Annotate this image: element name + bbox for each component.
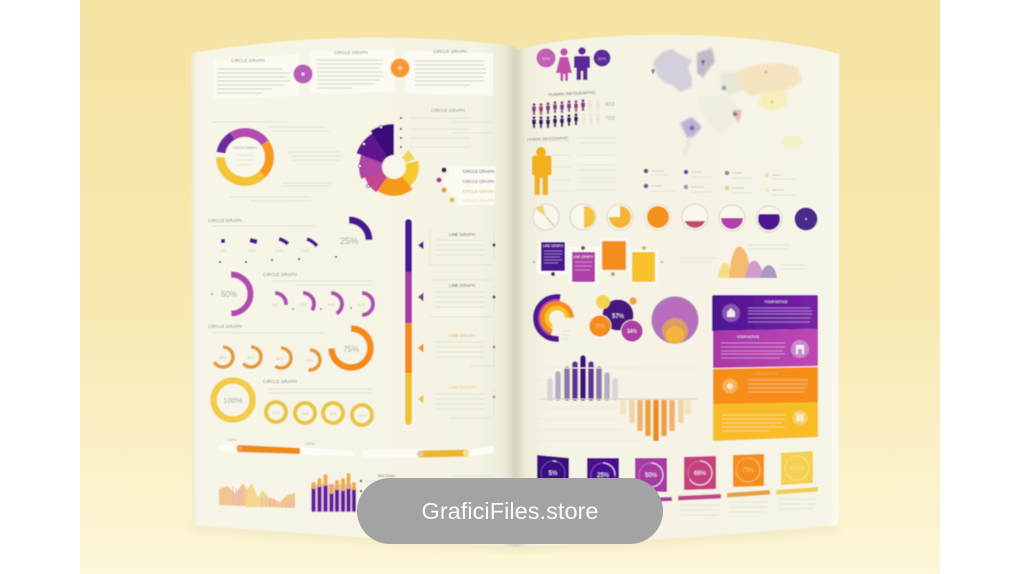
50 percent row: 30% <box>271 303 279 307</box>
percent tiles: 25% <box>597 473 610 479</box>
progress slider orange: 100% <box>228 438 236 442</box>
progress slider orange <box>218 438 354 456</box>
header panels: CIRCLE GRAPH <box>231 58 265 63</box>
25 percent row: CIRCLE GRAPH <box>208 218 242 223</box>
panel: yellow note <box>713 402 818 441</box>
percent circles male female: 50% <box>598 56 606 61</box>
100 percent row: 80% <box>272 411 280 415</box>
human body diagram: HUMAN INFOGRAPHIC <box>527 136 569 142</box>
50 percent row: 40% <box>327 303 335 307</box>
diverging bar chart: up <box>550 358 615 398</box>
100 percent row: 85% <box>301 412 309 416</box>
bubble chart: 25% <box>595 324 606 330</box>
percent tiles <box>537 451 813 495</box>
panel: orange note <box>713 367 818 404</box>
75 percent row: 75% <box>343 345 359 354</box>
rose chart markers: CIRCLE GRAPH <box>431 108 465 113</box>
map legend <box>644 169 795 195</box>
book shadow <box>192 520 838 552</box>
donut chart: CIRCLE GRAPH <box>233 146 258 150</box>
icon: pink circle <box>294 64 312 84</box>
heading: human infographic: HUMAN INFOGRAPHIC <box>548 90 596 97</box>
75 percent row: 65% <box>276 357 284 361</box>
pictogram rows <box>532 99 615 128</box>
25 percent row: 5% <box>221 249 227 253</box>
legend: circle graph: CIRCLE GRAPH <box>463 189 494 194</box>
bubble chart: 34% <box>627 329 638 335</box>
25 percent row <box>208 218 369 262</box>
world map <box>651 48 803 157</box>
75 percent row: 60% <box>247 356 255 360</box>
radial bar chart <box>534 295 580 341</box>
percent tiles: 5% <box>549 471 558 477</box>
25 percent row: 15% <box>275 249 283 253</box>
rose chart markers <box>400 108 492 148</box>
panel: pink note <box>713 329 818 368</box>
step cards: LINE GRAPH <box>573 255 594 259</box>
50 percent row <box>212 272 373 315</box>
50 percent row: 45% <box>357 303 365 307</box>
panel: purple note: YOUR NOTICE <box>765 300 788 304</box>
icon: orange circle <box>390 58 410 78</box>
step cards: LINE GRAPH <box>543 244 564 248</box>
percent tiles: 66% <box>694 471 707 477</box>
50 percent row: CIRCLE GRAPH <box>263 272 297 277</box>
pictogram rows: 8/10 <box>605 102 615 108</box>
left page <box>191 38 516 547</box>
100 percent row: 100% <box>223 396 243 405</box>
diverging bar chart: down <box>532 368 700 441</box>
bubble chart <box>589 295 643 342</box>
25 percent row: 25% <box>340 236 358 246</box>
watermark pill <box>357 478 663 544</box>
75 percent row: CIRCLE GRAPH <box>208 324 242 329</box>
legend: circle graph: CIRCLE GRAPH <box>463 198 494 203</box>
legend: circle graph: CIRCLE GRAPH <box>463 169 494 174</box>
100 percent row: CIRCLE GRAPH <box>263 379 297 384</box>
rose chart <box>356 126 432 205</box>
25 percent row: 20% <box>302 249 310 253</box>
100 percent row: 90% <box>329 412 337 416</box>
50 percent row: 35% <box>299 303 307 307</box>
legend: circle graph: CIRCLE GRAPH <box>463 179 494 184</box>
percent circles male female: 50% <box>542 56 550 61</box>
percent tiles: 100% <box>789 466 805 472</box>
100 percent row: 95% <box>358 414 366 418</box>
bell curve chart <box>680 245 805 278</box>
bubble chart: 57% <box>612 314 625 320</box>
stacked bar legend: Text Chart <box>377 474 396 478</box>
vertical timeline bar <box>404 217 414 427</box>
progress slider orange: 100% <box>306 442 314 446</box>
pictogram rows: 7/10 <box>605 116 615 122</box>
step cards <box>533 239 663 284</box>
100 percent row <box>214 379 372 425</box>
line graph notes: LINE GRAPH <box>449 333 475 338</box>
75 percent row <box>208 324 370 370</box>
header panels: CIRCLE GRAPH <box>334 50 368 55</box>
line graph notes: LINE GRAPH <box>449 232 475 237</box>
donut notes <box>212 122 342 201</box>
book <box>191 35 839 547</box>
panel: pink note: YOUR NOTICE <box>737 335 760 339</box>
percent tiles: 50% <box>645 473 658 479</box>
75 percent row: 55% <box>219 356 227 360</box>
progress slider yellow <box>362 446 494 458</box>
75 percent row: 70% <box>305 359 313 363</box>
header panels <box>213 49 493 99</box>
icon: man figure <box>574 47 590 80</box>
panel: purple note <box>712 295 818 331</box>
25 percent row: 10% <box>248 249 256 253</box>
watermark pill: GraficiFiles.store <box>422 498 598 524</box>
panel: orange note: YOUR NOTICE <box>755 372 778 376</box>
nested circle chart <box>652 297 698 344</box>
percent tiles: 75% <box>742 468 755 474</box>
line graph notes <box>418 229 496 418</box>
header panels: CIRCLE GRAPH <box>433 49 467 54</box>
stacked bar chart <box>311 475 356 512</box>
area chart <box>219 483 295 508</box>
percent circles male female <box>536 48 610 68</box>
line graph notes: LINE GRAPH <box>449 385 475 390</box>
eight fill-level circles <box>533 204 819 232</box>
donut chart <box>210 122 280 192</box>
right page <box>516 35 839 547</box>
line graph notes: LINE GRAPH <box>449 283 475 288</box>
stacked bar legend <box>360 474 492 492</box>
tile captions <box>640 487 818 515</box>
icon: woman figure <box>556 48 572 81</box>
legend: circle graph <box>436 166 495 205</box>
50 percent row: 50% <box>221 290 237 299</box>
human body diagram <box>527 136 616 195</box>
